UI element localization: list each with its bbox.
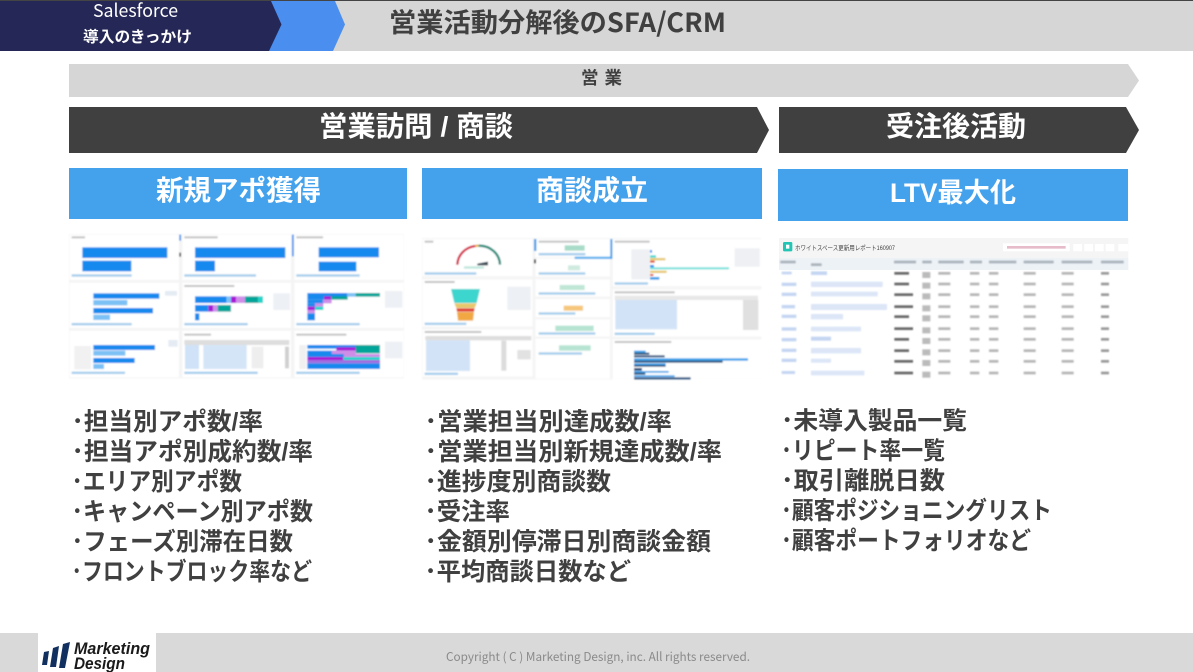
rows — [782, 272, 792, 274]
list: LTV最大化 metrics: ･顧客ポートフォリオなど — [781, 527, 1031, 555]
list: 新規アポ獲得 metrics: ･キャンペーン別アポ数 — [72, 498, 313, 526]
heading: LTV最大化: LTV最大化 — [890, 178, 1016, 208]
heading: LTV最大化 — [778, 169, 1128, 221]
logo: Marketing Design — [38, 633, 156, 672]
chart legends and links — [72, 274, 132, 277]
list: LTV最大化 metrics: ･取引離脱日数 — [781, 467, 945, 495]
arrow: 営業 — [69, 64, 1139, 97]
header band — [0, 0, 1193, 51]
heading: 新規アポ獲得: 新規アポ獲得 — [156, 175, 321, 206]
arrow: 営業訪問 / 商談 — [69, 107, 769, 153]
list: 新規アポ獲得 metrics: ･担当アポ別成約数/率 — [72, 438, 313, 466]
list: LTV最大化 metrics: ･未導入製品一覧 — [781, 407, 967, 435]
heading: 商談成立 — [422, 168, 762, 219]
gauge — [457, 246, 475, 265]
report thumbnail: LTV最大化 — [779, 238, 1128, 380]
logo: Marketing Design: Marketing — [74, 639, 151, 658]
list: LTV最大化 metrics: ･リピート率一覧 — [781, 437, 945, 465]
row 3 bars — [93, 345, 155, 350]
title: 営業活動分解後のSFA/CRM — [389, 1, 726, 40]
list: 商談成立 metrics — [424, 408, 722, 586]
list: 新規アポ獲得 metrics: ･フロントブロック率など — [72, 557, 312, 586]
heading: 新規アポ獲得 — [69, 168, 407, 219]
arrow: 受注後活動: 受注後活動 — [886, 111, 1026, 142]
list: 新規アポ獲得 metrics: ･エリア別アポ数 — [72, 468, 242, 496]
chart 1 bars — [631, 249, 650, 279]
metric cards — [565, 245, 585, 251]
copyright: Copyright ( C ) Marketing Design, inc. All rights reserved. — [446, 648, 750, 665]
header label: 導入のきっかけ: 導入のきっかけ — [83, 27, 192, 46]
arrow: 営業: 営業 — [581, 68, 622, 88]
list: 商談成立 metrics: ･進捗度別商談数 — [424, 468, 611, 496]
dashboard thumbnail: 商談成立 — [422, 238, 761, 379]
list: 新規アポ獲得 metrics — [72, 408, 313, 586]
chart 2 bars — [634, 351, 646, 353]
list: 商談成立 metrics: ･平均商談日数など — [424, 558, 631, 586]
row 2 bars — [93, 293, 159, 299]
list: 商談成立 metrics: ･受注率 — [424, 498, 510, 526]
list: LTV最大化 metrics: ･顧客ポジショニングリスト — [781, 496, 1052, 525]
footer band — [0, 633, 1193, 672]
list: 新規アポ獲得 metrics: ･担当別アポ数/率 — [72, 408, 263, 436]
tables — [425, 336, 531, 340]
heading: 商談成立: 商談成立 — [536, 175, 648, 206]
list: 商談成立 metrics: ･金額別停滞日別商談金額 — [424, 528, 711, 556]
list: LTV最大化 metrics — [781, 407, 1052, 555]
funnel — [451, 289, 480, 303]
report title: ホワイトスペース更新用レポート160907 — [795, 243, 895, 252]
arrow: 受注後活動 — [779, 107, 1139, 153]
list: 商談成立 metrics: ･営業担当別新規達成数/率 — [424, 438, 722, 466]
list: 商談成立 metrics: ･営業担当別達成数/率 — [424, 408, 672, 436]
report icon — [783, 242, 792, 251]
arrow: 営業訪問 / 商談: 営業訪問 / 商談 — [319, 111, 513, 142]
dashboard thumbnail: 新規アポ獲得 — [69, 234, 404, 378]
row 1 bars — [82, 247, 167, 258]
links — [425, 272, 476, 275]
list: 新規アポ獲得 metrics: ･フェーズ別滞在日数 — [72, 527, 293, 556]
